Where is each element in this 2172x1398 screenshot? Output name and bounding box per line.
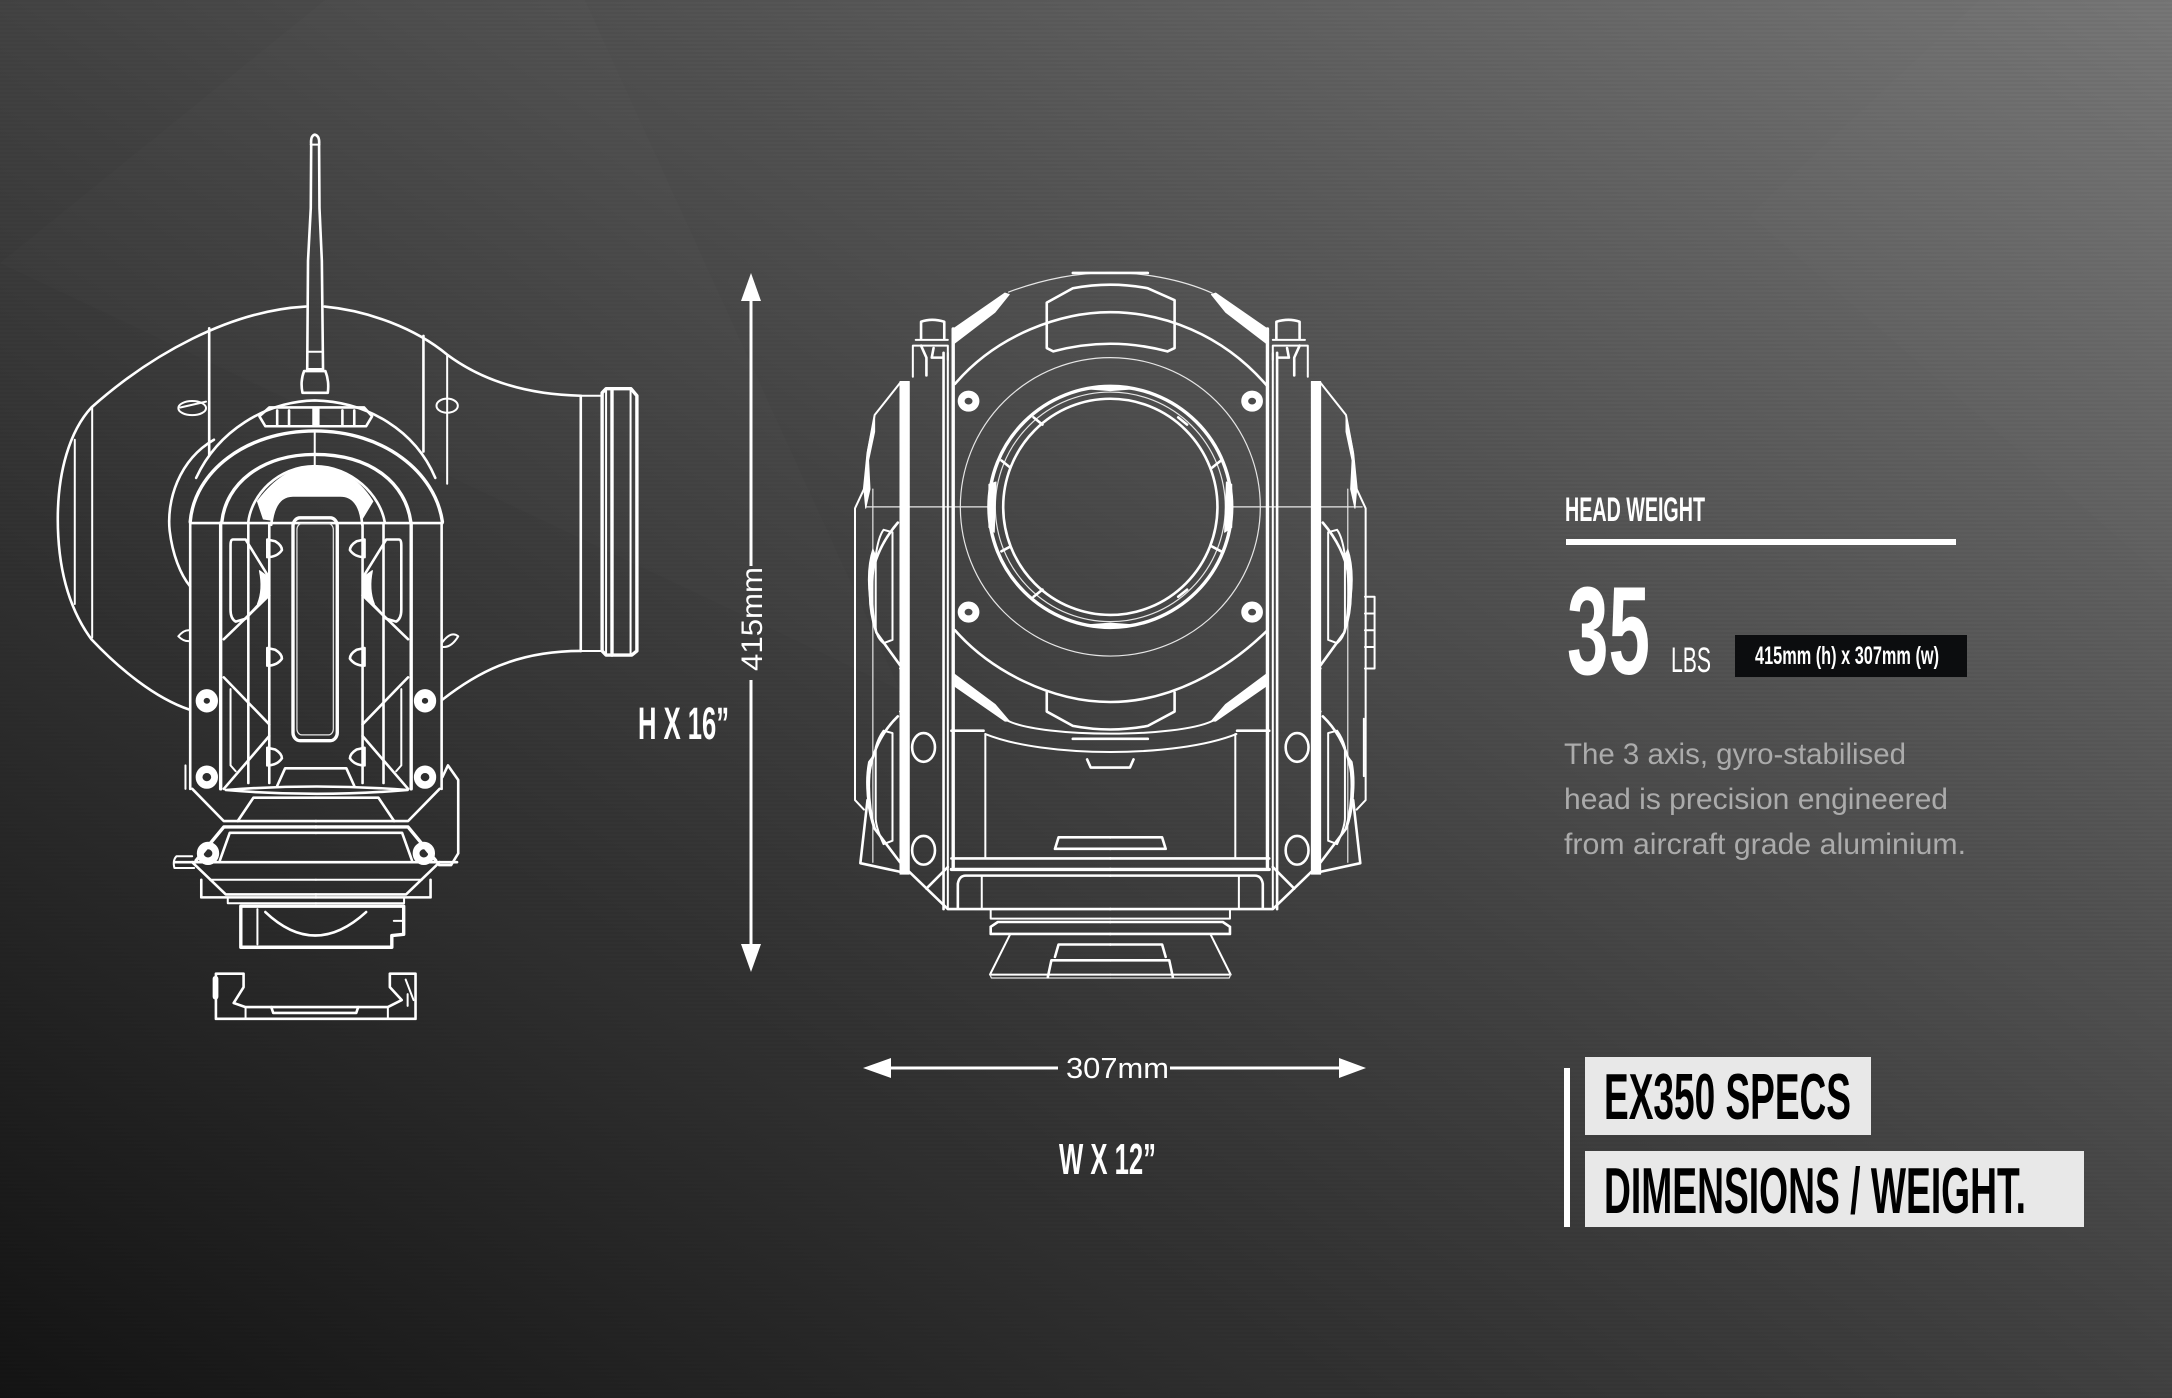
- lens ring: [960, 358, 1260, 656]
- height in inches label: H X 16”: [638, 698, 729, 749]
- title block: [1564, 1057, 2084, 1227]
- width dimension arrow: 307mm: [1066, 1053, 1169, 1085]
- left side structure: [190, 523, 316, 903]
- dimensions badge: 415mm (h) x 307mm (w): [1755, 642, 1939, 670]
- front head outer shell: [955, 272, 1267, 768]
- weight unit: LBS: [1671, 641, 1711, 680]
- yoke arches: [190, 400, 442, 523]
- base stack: [174, 765, 458, 868]
- height dimension arrow: [736, 273, 769, 972]
- description text: The 3 axis, gyro-stabilised: [1564, 738, 1906, 771]
- right side structure: [316, 523, 442, 903]
- centre axis line: [866, 506, 1362, 508]
- heading rule: [1566, 539, 1956, 545]
- width dimension arrow: [863, 1053, 1366, 1085]
- lower housing: [241, 906, 404, 947]
- height dimension arrow: 415mm: [736, 567, 769, 671]
- side body outline: [58, 307, 581, 710]
- description text: [1564, 738, 1966, 861]
- dovetail mount bracket: [213, 974, 416, 1019]
- left side structure: [855, 293, 1110, 978]
- antenna: [302, 135, 328, 393]
- weight value 35: 35: [1567, 562, 1650, 701]
- description text: from aircraft grade aluminium.: [1564, 828, 1966, 861]
- head weight heading: HEAD WEIGHT: [1565, 491, 1705, 529]
- side knob: [1364, 597, 1375, 776]
- description text: head is precision engineered: [1564, 783, 1948, 816]
- right side structure: [1110, 293, 1366, 978]
- front view technical drawing: [855, 272, 1375, 978]
- width in inches label: W X 12”: [1059, 1135, 1156, 1184]
- dimensions badge: [1735, 635, 1967, 677]
- inner pill: [271, 495, 362, 741]
- side view technical drawing: [58, 135, 637, 1019]
- title block: EX350 SPECS: [1604, 1060, 1851, 1133]
- lens barrel: [581, 389, 637, 655]
